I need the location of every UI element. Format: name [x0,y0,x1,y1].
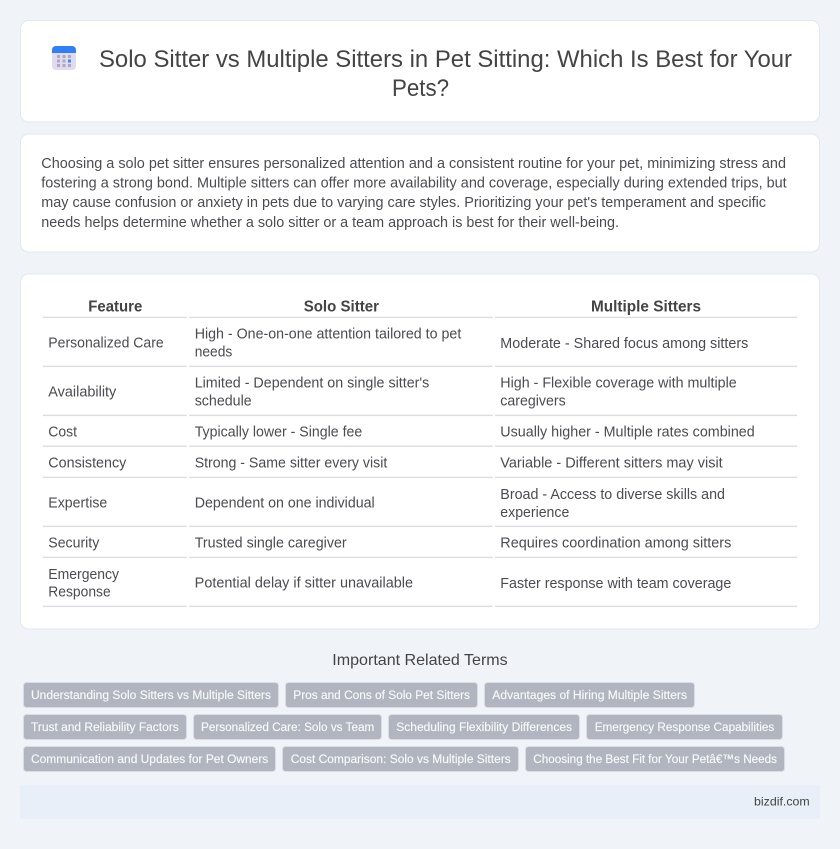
tag: Choosing the Best Fit for Your Petâ€™s Needs [533,752,777,766]
row: personalized care: needs [195,345,232,361]
row: emergency response: Potential delay if sitter unavailable [195,576,413,592]
row: cost: Cost [48,425,77,441]
row: security: Security [48,536,100,552]
tag [24,714,186,740]
row: emergency response: Emergency [48,567,120,583]
row: cost [43,425,797,447]
footer [20,785,820,819]
tag: Advantages of Hiring Multiple Sitters [492,688,687,702]
title [99,46,792,102]
row: expertise: Broad - Access to diverse skills and [500,487,725,503]
row: consistency: Variable - Different sitters may visit [500,456,723,472]
panel: comparison table [20,274,820,629]
text block: introduction paragraph: may cause confusion or anxiety in pets due to varying care styles. Prioritizing your pet's temperament and specific [41,195,766,211]
title: Pets? [392,75,449,102]
row: availability: Availability [48,385,117,401]
tag: Personalized Care: Solo vs Team [201,720,374,734]
row: expertise: Dependent on one individual [195,496,375,512]
row: availability: schedule [195,394,252,410]
footer: bizdif.com [754,795,810,809]
row: security [43,536,797,558]
row: security: Requires coordination among sitters [500,536,731,552]
tag [282,746,518,772]
row: security: Trusted single caregiver [195,536,347,552]
tag [24,682,278,708]
row: availability [43,376,797,416]
row: consistency [43,456,797,478]
row: availability: caregivers [500,394,566,410]
heading: important related terms: Important Related Terms [332,652,508,669]
text block: introduction paragraph [41,156,787,231]
title: Solo Sitter vs Multiple Sitters in Pet Sitting: Which Is Best for Your [99,46,792,73]
tag: Pros and Cons of Solo Pet Sitters [293,688,470,702]
tag [24,746,276,772]
row: emergency response: Faster response with team coverage [500,576,731,592]
tag: Understanding Solo Sitters vs Multiple Sitters [31,688,271,702]
table header: Multiple Sitters [591,298,701,315]
panel: related term tags [24,682,784,772]
row: availability: Limited - Dependent on single sitter's [195,376,429,392]
row: availability: High - Flexible coverage with multiple [500,376,737,392]
row: cost: Typically lower - Single fee [195,425,362,441]
row: cost: Usually higher - Multiple rates combined [500,425,755,441]
row: personalized care: Moderate - Shared focus among sitters [500,336,748,352]
tag [194,714,382,740]
text block: introduction paragraph: needs helps determine whether a solo sitter or a team approach is best for their well-being. [41,215,619,231]
row: personalized care: High - One-on-one attention tailored to pet [195,326,461,342]
tag [388,714,580,740]
tag [526,746,784,772]
text block: introduction paragraph: fostering a strong bond. Multiple sitters can offer more availability and coverage, especially during extended trips, but [41,176,787,192]
row: consistency: Strong - Same sitter every visit [195,456,387,472]
table header [43,298,797,318]
tag: Emergency Response Capabilities [595,720,774,734]
icon: calendar [52,46,76,70]
panel: title card [20,20,820,122]
panel: introduction [20,134,820,252]
tag [484,682,694,708]
row: expertise: experience [500,505,569,521]
row: consistency: Consistency [48,456,127,472]
row: expertise: Expertise [48,496,107,512]
tag [586,714,782,740]
tag [286,682,478,708]
tag: Communication and Updates for Pet Owners [31,752,268,766]
row: expertise [43,487,797,527]
tag: Cost Comparison: Solo vs Multiple Sitters [291,752,511,766]
tag: Scheduling Flexibility Differences [396,720,572,734]
row: emergency response [43,567,797,607]
row: personalized care: Personalized Care [48,336,164,352]
table header: Solo Sitter [304,298,379,315]
tag: Trust and Reliability Factors [31,720,179,734]
row: emergency response: Response [48,585,111,601]
row: personalized care [43,326,797,367]
text block: introduction paragraph: Choosing a solo pet sitter ensures personalized attention and a consistent routine for your pet, minimizing stress and [41,156,786,172]
table header: Feature [88,298,142,315]
